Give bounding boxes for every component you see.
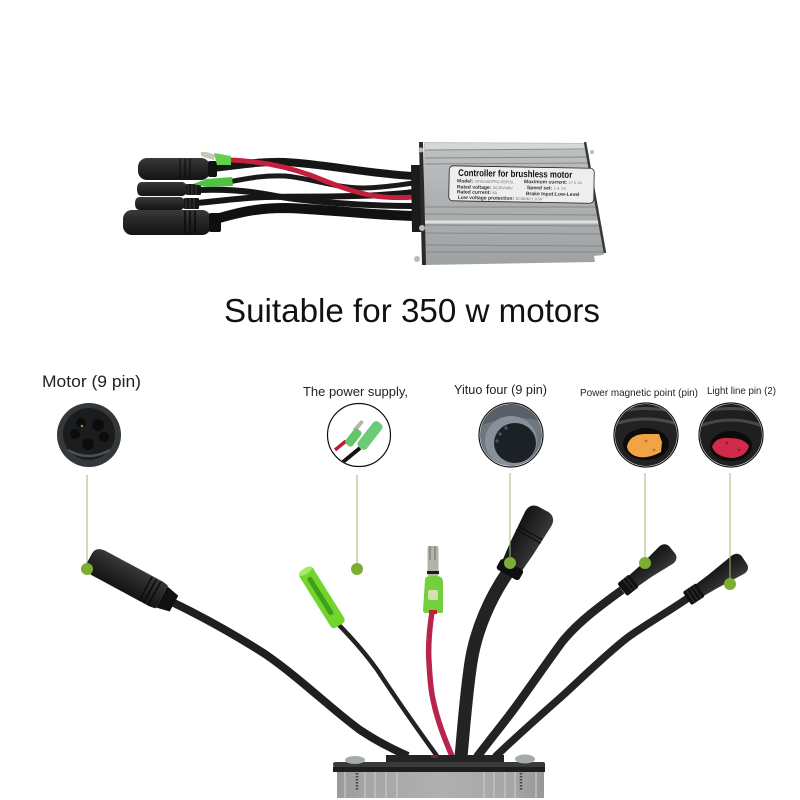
controller housing, bottom <box>333 754 545 798</box>
controller label: Rated current: 6A <box>457 189 498 196</box>
controller label: Low voltage protection: DC30/40 1 0.5V <box>458 195 543 202</box>
connector: small lower <box>135 197 199 210</box>
connector: large lower <box>123 210 221 235</box>
controller label: Maximum current: 17.5 1A <box>524 179 582 186</box>
red lead and bullet terminal <box>423 546 452 756</box>
connector: small upper <box>137 182 201 196</box>
label: Light line pin (2): Light line pin (2) <box>707 386 776 397</box>
motor connector <box>83 546 181 616</box>
terminal: black lead <box>193 177 233 187</box>
label: Power magnetic point (pin): Power magnetic point (pin) <box>580 387 698 399</box>
controller label <box>449 166 594 203</box>
motor cable <box>172 602 408 756</box>
label: Yituo four (9 pin): Yituo four (9 pin) <box>454 383 547 397</box>
cables to controller <box>196 160 414 219</box>
controller label: Rated voltage: DC36V/48V <box>457 184 513 191</box>
controller housing <box>411 142 605 265</box>
green tube terminal and black lead <box>297 564 437 756</box>
magnetic point connector <box>615 542 679 599</box>
controller label: Model: XF36/48DPRD-EBF(SL <box>457 178 514 185</box>
label: Motor (9 pin): Motor (9 pin) <box>42 372 141 391</box>
icon: Yituo connector face <box>478 402 544 468</box>
Yituo connector <box>494 502 557 582</box>
icon: power supply terminals <box>328 404 390 466</box>
terminal: red lead <box>201 152 231 165</box>
magnetic point cable <box>477 590 622 757</box>
icon: red connector face <box>699 403 763 467</box>
label: The power supply: The power supply, <box>303 385 408 399</box>
callout: Yituo four <box>504 473 516 569</box>
icon: motor connector face <box>57 403 121 467</box>
close-up: controller and five leads <box>83 502 751 798</box>
controller label: Brake Input:Low-Level <box>526 191 580 198</box>
icon: orange connector face <box>614 403 678 467</box>
title: Suitable for 350 w motors <box>224 292 600 329</box>
controller label: Controller for brushless motor <box>458 168 572 181</box>
callout: light line pin <box>724 473 736 590</box>
light line connector <box>681 551 751 608</box>
controller label: Speed set: 1-4, 2S <box>527 185 566 192</box>
callout: power supply <box>351 475 363 575</box>
product photo: controller with cables <box>123 142 605 265</box>
connector: motor top <box>138 158 217 180</box>
Yituo cable <box>461 572 508 757</box>
callout: motor <box>81 475 93 575</box>
callout: power magnetic point <box>639 473 651 569</box>
light line cable <box>495 598 688 757</box>
